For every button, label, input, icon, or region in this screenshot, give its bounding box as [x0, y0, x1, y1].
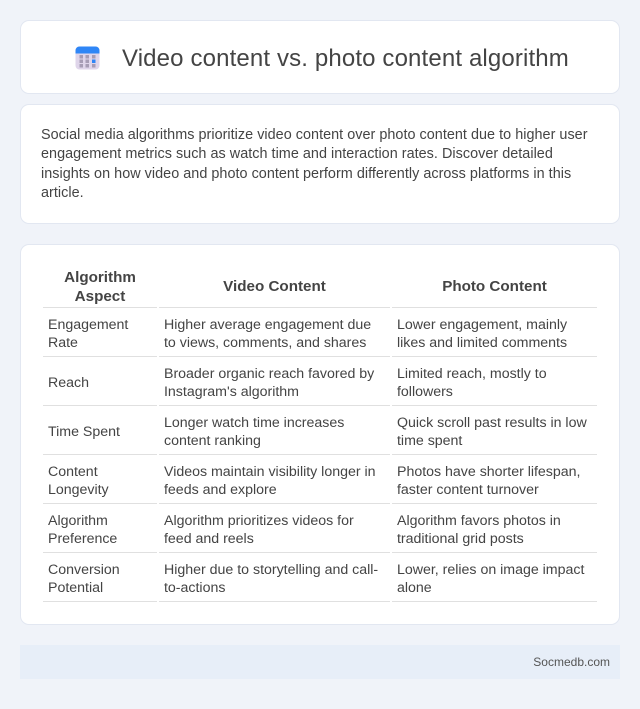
comparison table: Algorithm favors photos in — [397, 513, 561, 529]
column header: Video Content: Video Content — [223, 278, 326, 295]
intro paragraph: insights on how video and photo content perform differently across platforms in this — [41, 166, 571, 182]
comparison table: to-actions — [164, 580, 225, 596]
intro paragraph: engagement metrics such as watch time and interaction rates. Discover detailed — [41, 146, 553, 162]
comparison table: Time Spent — [48, 424, 120, 440]
comparison table: Content — [48, 464, 98, 480]
panel: title card — [20, 20, 620, 94]
intro paragraph: Social media algorithms prioritize video content over photo content due to higher user — [41, 127, 588, 143]
row: Engagement Rate — [48, 317, 567, 351]
comparison table — [43, 269, 597, 602]
comparison table: time spent — [397, 433, 462, 449]
comparison table: Engagement — [48, 317, 128, 333]
column header: Algorithm Aspect: Aspect — [75, 288, 125, 305]
footer text: Socmedb.com: Socmedb.com — [533, 655, 610, 669]
comparison table: Quick scroll past results in low — [397, 415, 587, 431]
comparison table: to views, comments, and shares — [164, 335, 366, 351]
comparison table: feeds and explore — [164, 482, 277, 498]
column header: Algorithm Aspect — [64, 269, 136, 305]
comparison table: Preference — [48, 531, 117, 547]
comparison table: Broader organic reach favored by — [164, 366, 374, 382]
panel: comparison table card — [20, 244, 620, 625]
comparison table: Reach — [48, 375, 89, 391]
comparison table: alone — [397, 580, 432, 596]
comparison table: likes and limited comments — [397, 335, 567, 351]
comparison table: Videos maintain visibility longer in — [164, 464, 376, 480]
panel: intro text card — [20, 104, 620, 224]
row: Reach — [48, 366, 547, 400]
comparison table: content ranking — [164, 433, 261, 449]
comparison table: Potential — [48, 580, 103, 596]
column header: Photo Content: Photo Content — [442, 278, 547, 295]
comparison table: Instagram's algorithm — [164, 384, 299, 400]
comparison table: Longevity — [48, 482, 109, 498]
comparison table: Higher due to storytelling and call- — [164, 562, 378, 578]
row: Time Spent — [48, 415, 587, 449]
row: Algorithm Preference — [48, 513, 561, 547]
column header: Algorithm Aspect: Algorithm — [64, 269, 136, 286]
row: Conversion Potential — [48, 562, 584, 596]
comparison table: Rate — [48, 335, 78, 351]
comparison table: Higher average engagement due — [164, 317, 371, 333]
comparison table: Algorithm — [48, 513, 108, 529]
comparison table: Longer watch time increases — [164, 415, 344, 431]
comparison table: Photos have shorter lifespan, — [397, 464, 580, 480]
comparison table: Algorithm prioritizes videos for — [164, 513, 354, 529]
comparison table: followers — [397, 384, 453, 400]
comparison table: Limited reach, mostly to — [397, 366, 547, 382]
comparison table: Conversion — [48, 562, 120, 578]
comparison table: feed and reels — [164, 531, 254, 547]
intro paragraph: article. — [41, 185, 84, 201]
footer bar — [20, 645, 620, 679]
intro paragraph — [41, 127, 588, 201]
comparison table: faster content turnover — [397, 482, 539, 498]
comparison table: Lower, relies on image impact — [397, 562, 584, 578]
comparison table: Lower engagement, mainly — [397, 317, 567, 333]
title: Video content vs. photo content algorithm — [122, 45, 569, 72]
icon: calendar — [76, 46, 100, 70]
row: Content Longevity — [48, 464, 580, 498]
comparison table: traditional grid posts — [397, 531, 524, 547]
